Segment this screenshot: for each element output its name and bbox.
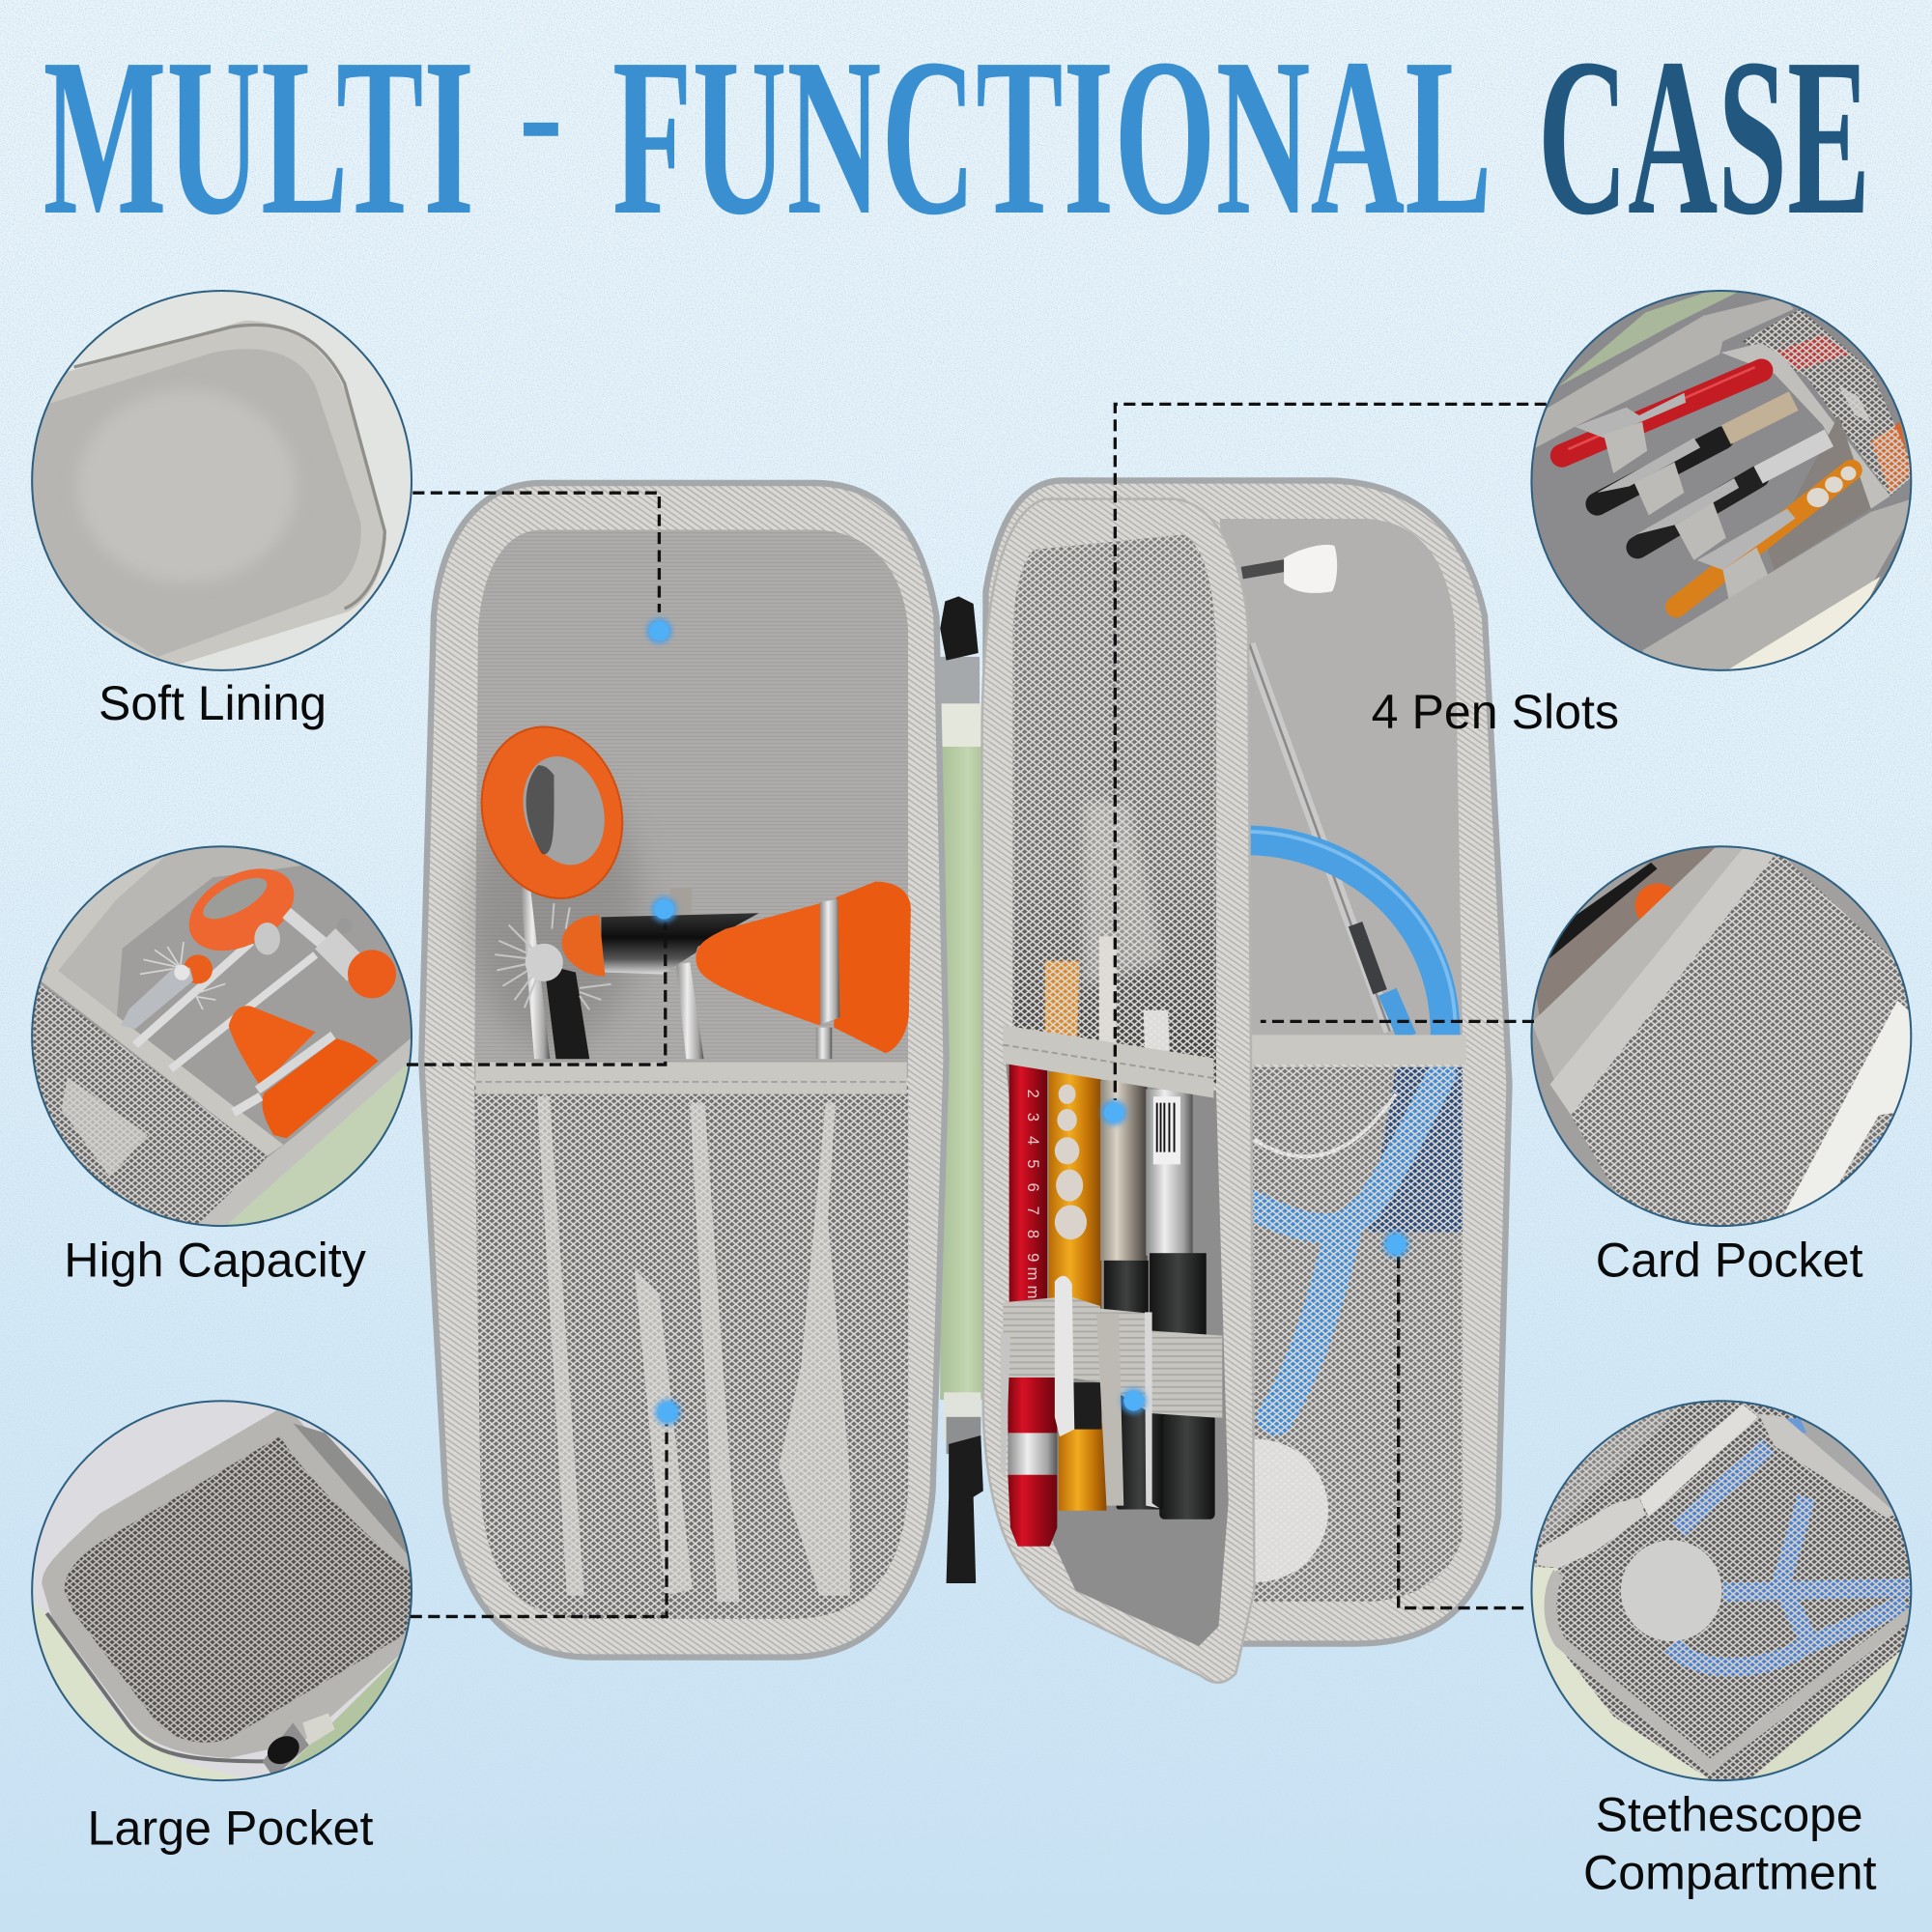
lower pens bbox=[1159, 1405, 1215, 1520]
pupil gauge dots bbox=[1055, 1084, 1087, 1239]
detail circle: soft lining bbox=[33, 292, 411, 669]
labels: 4 Pen Slots bbox=[1372, 685, 1619, 739]
flap pocket band bbox=[1003, 1025, 1213, 1097]
hammer parts bbox=[135, 942, 251, 1045]
open flap with pen slots bbox=[982, 499, 1254, 1683]
marker dots bbox=[646, 618, 1409, 1425]
flap inner panel bbox=[1006, 1060, 1229, 1646]
zipper hinge strip bbox=[940, 596, 987, 1583]
pens bbox=[1562, 370, 1761, 456]
soft lining bbox=[474, 529, 908, 1078]
stethoscope bbox=[1242, 545, 1455, 1037]
pen ruler numbers: 2 3 4 5 6 7 8 9mm bbox=[1024, 1090, 1042, 1298]
detail circle: high capacity bbox=[33, 847, 411, 1225]
detail circle outline: large pocket bbox=[32, 1401, 412, 1780]
back pocket mesh bbox=[1252, 1066, 1463, 1602]
title: - bbox=[519, 27, 563, 201]
leader lines bbox=[407, 404, 1547, 1616]
labels bbox=[64, 676, 1877, 1899]
tool: hammer bbox=[562, 882, 911, 1053]
detail circle outline: soft lining bbox=[32, 291, 412, 670]
pen clips bbox=[1055, 1276, 1074, 1436]
elastic band bbox=[1003, 1296, 1100, 1382]
detail circle outline: card pocket bbox=[1531, 846, 1911, 1226]
flap mesh bbox=[1010, 529, 1220, 1091]
back lining bbox=[1220, 519, 1463, 1041]
labels: Large Pocket bbox=[88, 1801, 374, 1855]
title: MULTI bbox=[43, 13, 474, 262]
reflex hammer tools bbox=[463, 711, 911, 1059]
left case half bbox=[421, 483, 947, 1658]
tools seen through mesh bbox=[537, 1096, 850, 1602]
pens bbox=[1001, 1064, 1222, 1547]
detail circle outline: stethoscope compartment bbox=[1531, 1401, 1911, 1780]
stethoscope through mesh bbox=[1252, 1074, 1441, 1417]
pocket mesh bbox=[474, 1084, 908, 1619]
right case back half bbox=[985, 480, 1509, 1644]
labels: Card Pocket bbox=[1596, 1233, 1863, 1287]
detail circle: stethoscope compartment bbox=[1517, 1391, 1922, 1797]
tool: pinwheel bbox=[495, 903, 611, 1009]
tool: stems bbox=[521, 888, 832, 1059]
detail circle: pen slots bbox=[1517, 280, 1922, 686]
detail circle outline: high capacity bbox=[32, 846, 412, 1226]
title bbox=[43, 13, 1870, 262]
back pocket band bbox=[1249, 1035, 1466, 1065]
labels: Stethescope bbox=[1596, 1787, 1863, 1841]
detail circle outline: pen slots bbox=[1531, 291, 1911, 670]
detail circle: large pocket bbox=[19, 1391, 425, 1797]
labels: Soft Lining bbox=[99, 676, 327, 730]
labels: Compartment bbox=[1583, 1845, 1877, 1899]
pocket band bbox=[475, 1062, 907, 1094]
tool: mirror ring bbox=[463, 711, 641, 914]
clips and elastics bbox=[1575, 393, 1795, 570]
labels: High Capacity bbox=[64, 1233, 366, 1287]
detail circle: card pocket bbox=[1528, 838, 1922, 1233]
